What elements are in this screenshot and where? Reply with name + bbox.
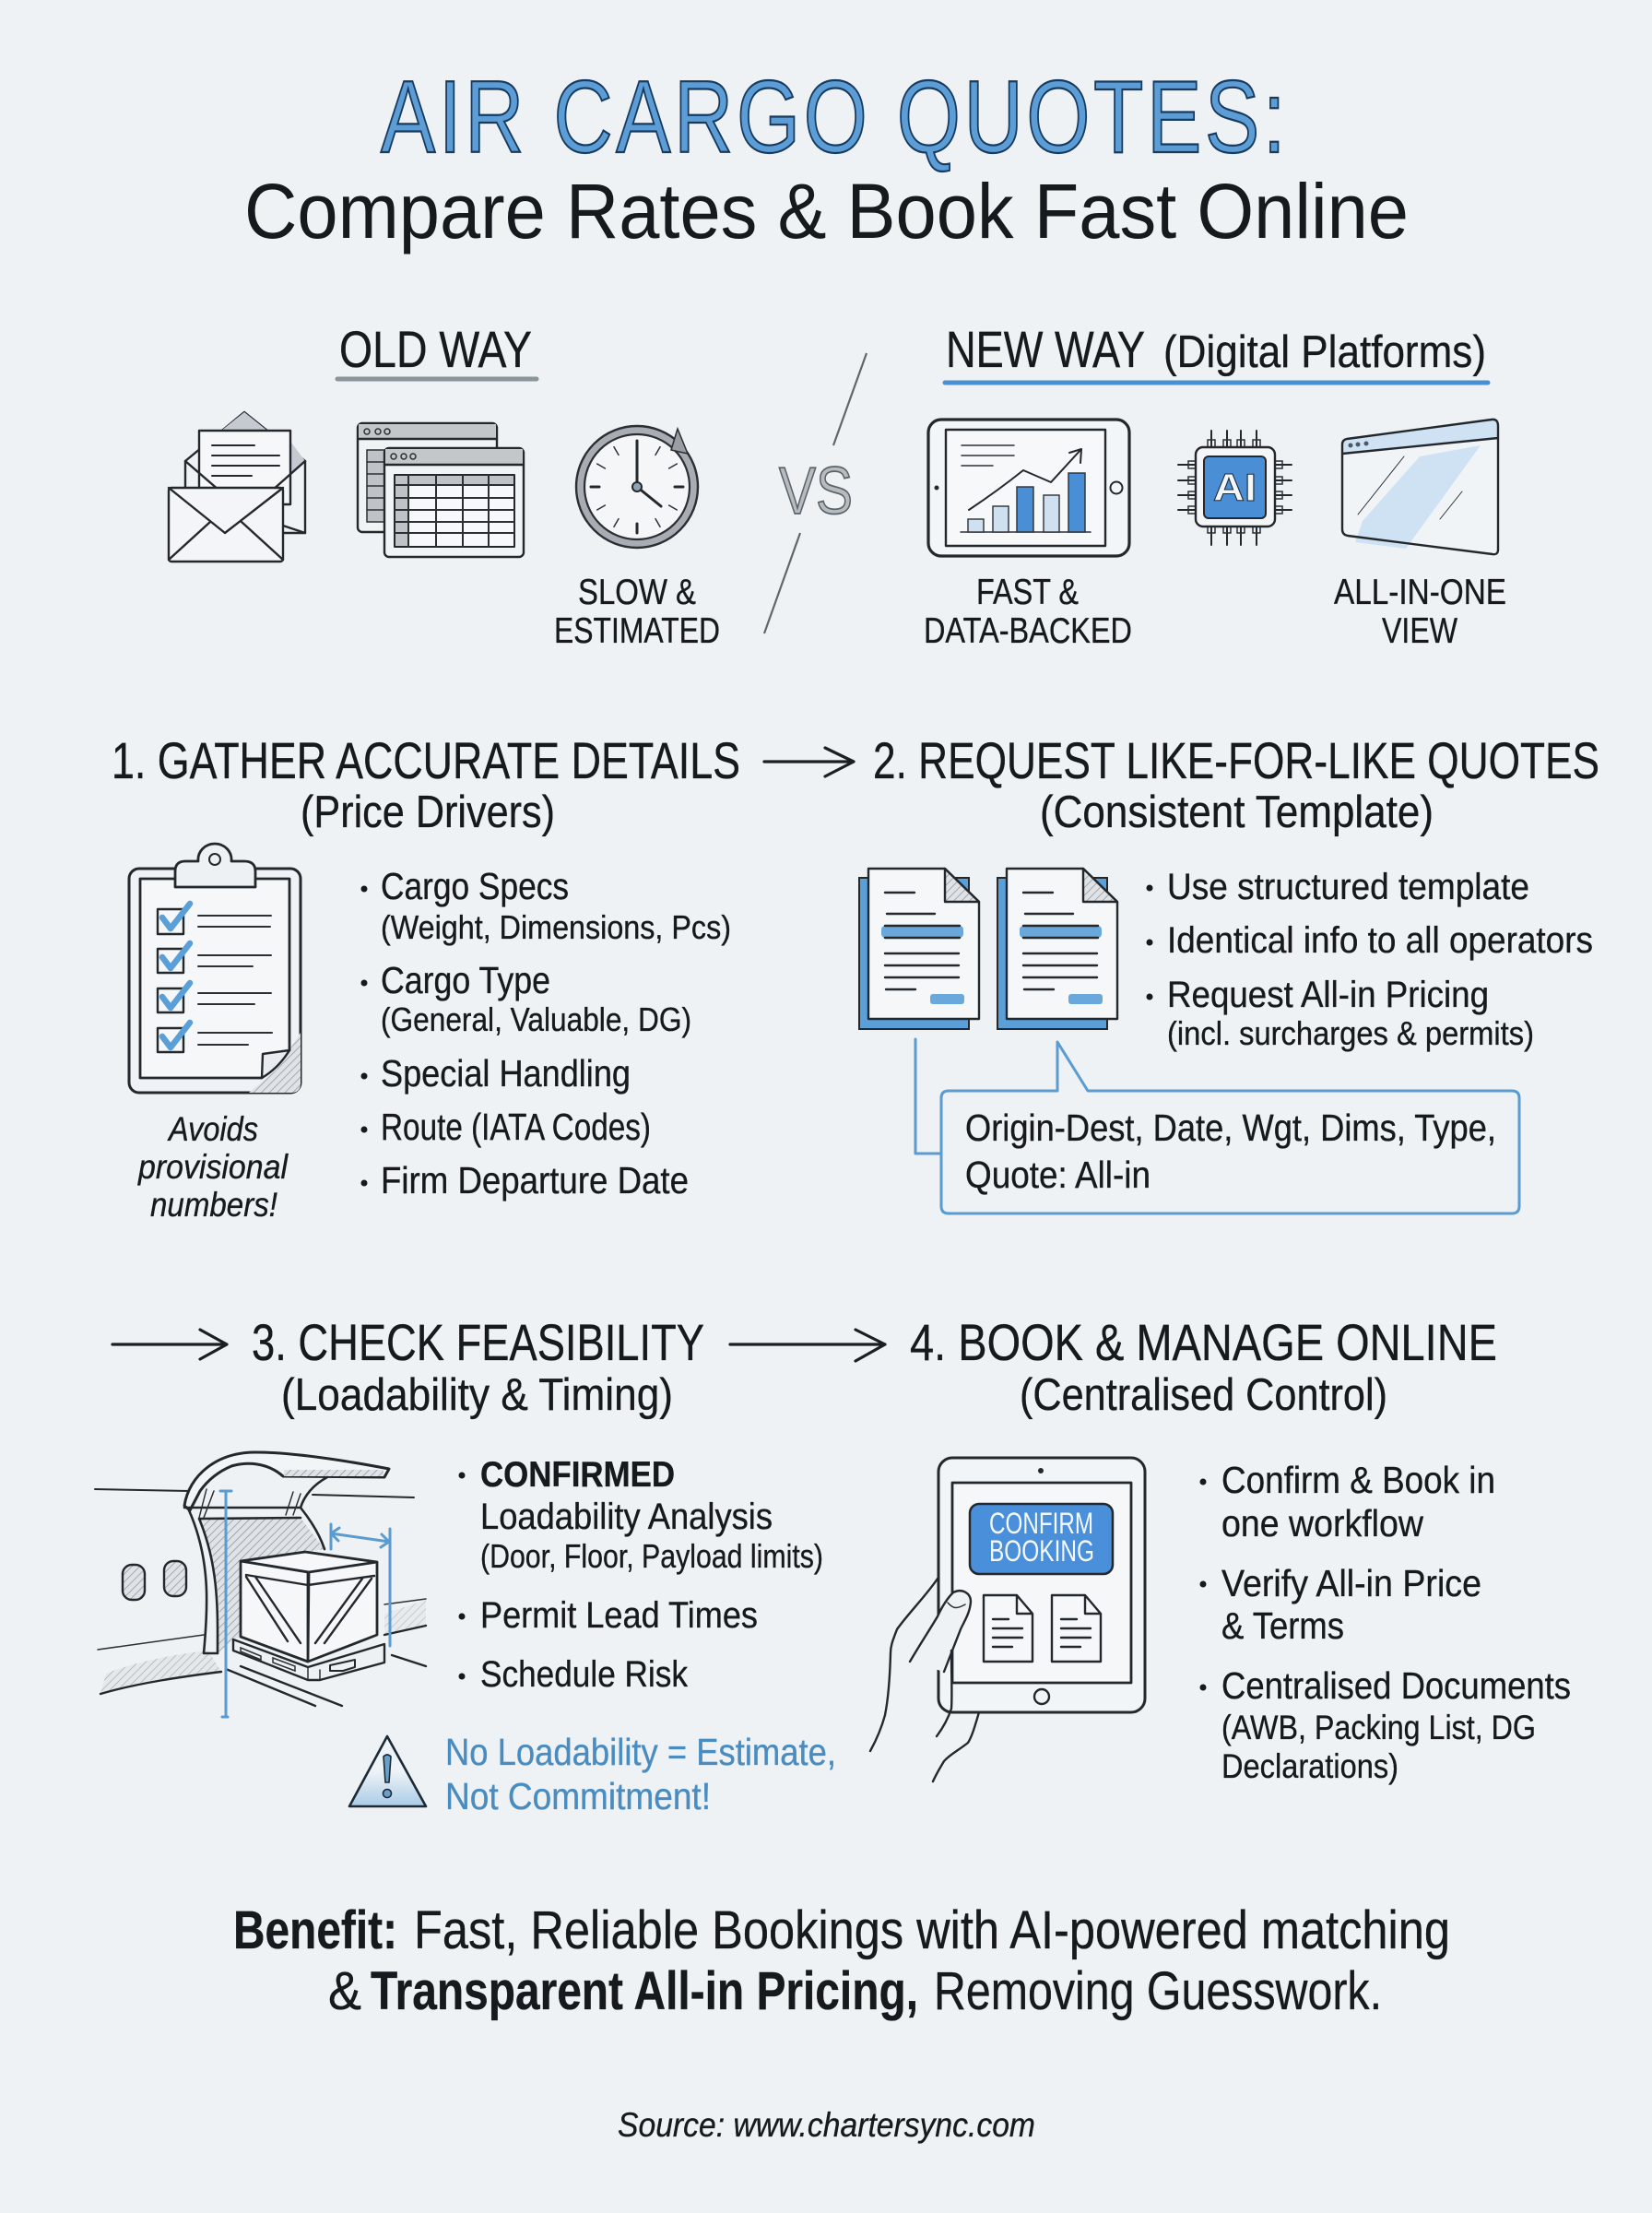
icon: ai chip: AI (1213, 466, 1257, 509)
panel: step 1 gather details (112, 731, 740, 1224)
list: booking bullets: Verify All-in Price (1221, 1562, 1481, 1604)
list: feasibility bullets: Permit Lead Times (480, 1595, 758, 1636)
icon: document two (997, 869, 1117, 1029)
heading: step 1: 1. GATHER ACCURATE DETAILS (112, 731, 740, 789)
heading: new way: (Digital Platforms) (1163, 327, 1486, 377)
list: feasibility bullets: Schedule Risk (480, 1654, 689, 1695)
benefit statement (233, 1900, 1450, 2021)
note: avoids provisional numbers (137, 1110, 289, 1224)
button: confirm booking (970, 1504, 1113, 1574)
icon: clock (576, 426, 698, 548)
icon: all-in-one window (1342, 420, 1498, 555)
subheading: centralised control: (Centralised Control) (1020, 1370, 1387, 1420)
illustration: aircraft cargo door (95, 1452, 426, 1717)
list: price driver bullets: (Weight, Dimensions, Pcs) (381, 908, 731, 946)
benefit statement: & (328, 1961, 361, 2021)
list: template bullets (1147, 867, 1593, 1052)
label: fast and data-backed (924, 573, 1132, 651)
panel: step 4 book and manage (870, 1313, 1571, 1785)
callout: template text (915, 1039, 1519, 1213)
list: booking bullets: (AWB, Packing List, DG (1221, 1709, 1536, 1746)
benefit statement: Benefit: (233, 1900, 397, 1960)
vs divider (764, 353, 867, 633)
note: avoids provisional numbers: provisional (137, 1148, 289, 1186)
list: price driver bullets: Firm Departure Date (381, 1159, 689, 1201)
list: template bullets: (incl. surcharges & permits) (1167, 1014, 1534, 1052)
subheading: price drivers: (Price Drivers) (301, 787, 555, 837)
label: slow and estimated: SLOW & (578, 573, 696, 612)
label: fast and data-backed: FAST & (976, 573, 1079, 612)
icon: clipboard checklist (129, 844, 301, 1093)
illustration: tablet in hand (870, 1458, 1145, 1781)
benefit statement: Removing Guesswork. (934, 1961, 1382, 2021)
new way underline (945, 380, 1488, 385)
list: feasibility bullets: (Door, Floor, Payload limits) (480, 1537, 823, 1575)
list: booking bullets: Confirm & Book in (1221, 1459, 1495, 1501)
note: avoids provisional numbers: Avoids (167, 1110, 258, 1148)
list: booking bullets: one workflow (1221, 1502, 1423, 1544)
callout: template text: Quote: All-in (965, 1154, 1150, 1196)
label: all-in-one view: VIEW (1382, 611, 1457, 651)
list: price driver bullets (361, 865, 731, 1201)
arrow: into step 3 (112, 1330, 227, 1359)
subheading: consistent template: (Consistent Template) (1040, 787, 1434, 837)
panel: step 3 check feasibility (95, 1313, 836, 1817)
note: avoids provisional numbers: numbers! (150, 1186, 277, 1224)
list: template bullets: Identical info to all operators (1167, 920, 1593, 961)
warning text: No Loadability = Estimate, (445, 1731, 836, 1773)
heading: new way: NEW WAY (946, 320, 1145, 378)
list: price driver bullets: Route (IATA Codes) (381, 1106, 651, 1148)
label: slow and estimated (554, 573, 720, 651)
heading: step 3: 3. CHECK FEASIBILITY (252, 1313, 704, 1371)
heading: step 4: 4. BOOK & MANAGE ONLINE (910, 1313, 1497, 1371)
list: booking bullets: Centralised Documents (1221, 1664, 1571, 1707)
icon: envelopes (169, 412, 305, 562)
list: feasibility bullets: CONFIRMED (480, 1455, 675, 1495)
icon: ai chip (1178, 431, 1292, 545)
icon: document one (859, 869, 979, 1029)
label: slow and estimated: ESTIMATED (554, 611, 720, 651)
title: AIR CARGO QUOTES: (381, 61, 1286, 174)
list: booking bullets (1200, 1459, 1571, 1785)
label: all-in-one view: ALL-IN-ONE (1334, 573, 1506, 612)
list: feasibility bullets: Loadability Analysis (480, 1497, 773, 1537)
icon: spreadsheets (358, 423, 524, 557)
source line: Source: www.chartersync.com (618, 2106, 1035, 2144)
heading: old way: OLD WAY (339, 320, 532, 378)
list: price driver bullets: Special Handling (381, 1052, 631, 1095)
list: price driver bullets: (General, Valuable, DG) (381, 1000, 691, 1038)
panel: old way (169, 320, 720, 651)
list: template bullets: Use structured template (1167, 867, 1529, 907)
panel: new way (924, 320, 1506, 651)
subheading: loadability and timing: (Loadability & Timing) (281, 1370, 673, 1420)
list: booking bullets: Declarations) (1221, 1747, 1398, 1785)
callout: template text: Origin-Dest, Date, Wgt, Dims, Type, (965, 1106, 1496, 1149)
subtitle: Compare Rates & Book Fast Online (244, 168, 1409, 254)
list: template bullets: Request All-in Pricing (1167, 975, 1489, 1015)
button: confirm booking: CONFIRM (989, 1507, 1093, 1540)
arrow: step 1 to step 2 (764, 748, 854, 776)
icon: warning triangle (349, 1736, 426, 1806)
label: all-in-one view (1334, 573, 1506, 651)
benefit statement: Transparent All-in Pricing, (371, 1961, 918, 2021)
warning text: Not Commitment! (445, 1775, 711, 1817)
list: price driver bullets: Cargo Type (381, 959, 550, 1001)
button: confirm booking: BOOKING (989, 1534, 1094, 1568)
label: fast and data-backed: DATA-BACKED (924, 611, 1132, 651)
heading: new way (946, 320, 1486, 378)
icon: tablet chart (928, 420, 1129, 556)
warning text (445, 1731, 836, 1817)
vs divider: VS (779, 455, 853, 528)
list: price driver bullets: Cargo Specs (381, 865, 569, 907)
list: booking bullets: & Terms (1221, 1604, 1344, 1647)
panel: step 2 request quotes (859, 731, 1599, 1213)
benefit statement: Fast, Reliable Bookings with AI-powered matching (414, 1900, 1450, 1960)
list: feasibility bullets (459, 1455, 823, 1695)
old way underline (337, 376, 537, 382)
arrow: step 3 to step 4 (730, 1330, 885, 1361)
